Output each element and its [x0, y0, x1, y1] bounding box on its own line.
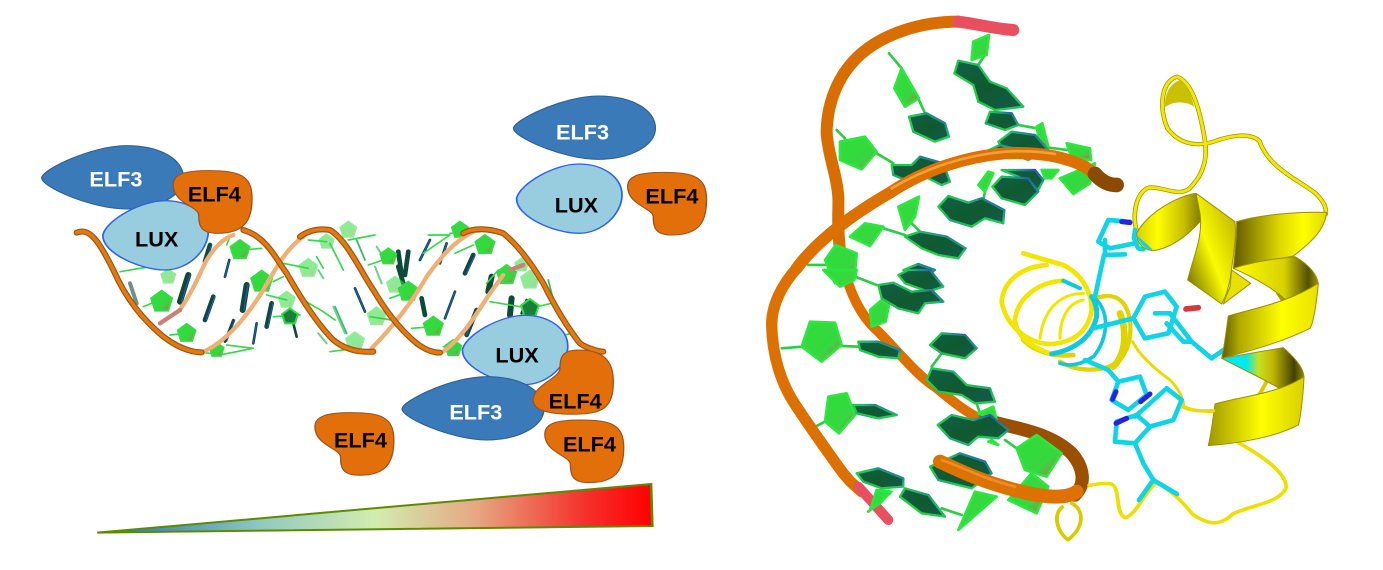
sugar rings: [802, 270, 1062, 530]
protein LUX bottom: [462, 315, 568, 385]
protein ELF3 left: ELF3: [89, 166, 142, 191]
side chain sticks: [1085, 220, 1223, 500]
protein LUX left: LUX: [135, 226, 179, 251]
protein LUX bottom: LUX: [495, 343, 539, 368]
bonds: [120, 232, 572, 355]
bonds: [782, 277, 1062, 515]
panel: protein-DNA crystal structure: [772, 22, 1327, 540]
protein ELF4 free centre: ELF4: [334, 427, 387, 452]
back strands: [180, 232, 503, 352]
protein ELF4 left: [173, 171, 252, 233]
loop to helix: [1133, 342, 1213, 412]
protein ELF3 top right: [514, 96, 655, 159]
DNA double helix: [77, 222, 603, 356]
protein LUX left: [103, 201, 208, 270]
rear coil turns: [1023, 296, 1130, 370]
protein ELF3 left: [42, 146, 184, 209]
protein ELF4 free right: ELF4: [563, 431, 616, 456]
red oxygen: [1186, 308, 1198, 309]
protein ELF4 bound bottom: ELF4: [549, 388, 602, 413]
front strands: [77, 229, 603, 353]
protein ELF3 bottom: [402, 377, 544, 440]
gradient wedge: [97, 484, 652, 533]
DNA front strand lower: [772, 268, 1077, 520]
sugar rings: [825, 35, 1095, 283]
protein ELF4 top right: [628, 172, 707, 235]
bonds: [808, 53, 1067, 265]
protein helix ribbon: [1137, 193, 1327, 446]
protein ELF4 free right: [545, 420, 624, 483]
base rings: [853, 270, 1008, 517]
protein LUX top right: LUX: [555, 192, 599, 217]
upper nucleotide bases: [808, 35, 1095, 283]
DNA front strand upper: [797, 151, 1117, 268]
pink strand ends: [160, 265, 523, 323]
slender dark bases: [130, 240, 527, 343]
protein ELF3 top right: ELF3: [556, 119, 609, 144]
base rings: [892, 61, 1048, 277]
upper DNA back strand: [827, 22, 1013, 250]
protein LUX top right: [517, 164, 622, 233]
protein ELF4 bound bottom: [533, 350, 613, 414]
front coil turns: [1002, 253, 1092, 354]
protein ELF3 bottom: ELF3: [449, 399, 502, 424]
protein loops: [1057, 77, 1326, 540]
sugars: [151, 222, 539, 356]
protein helix coil and side chains: [1002, 220, 1223, 500]
blue nitrogens: [1113, 222, 1150, 423]
lower DNA back strand: [848, 283, 1082, 495]
cyan helix sections: [1052, 281, 1106, 365]
protein ELF4 free centre: [315, 413, 394, 475]
panel: schematic of ELF proteins on DNA: [42, 96, 707, 533]
lower nucleotide bases: [782, 270, 1062, 530]
protein ELF4 top right: ELF4: [645, 183, 698, 208]
base highlights: [182, 240, 553, 343]
loop to ribbon stem: [1258, 382, 1267, 397]
protein ELF4 left: ELF4: [188, 181, 241, 206]
